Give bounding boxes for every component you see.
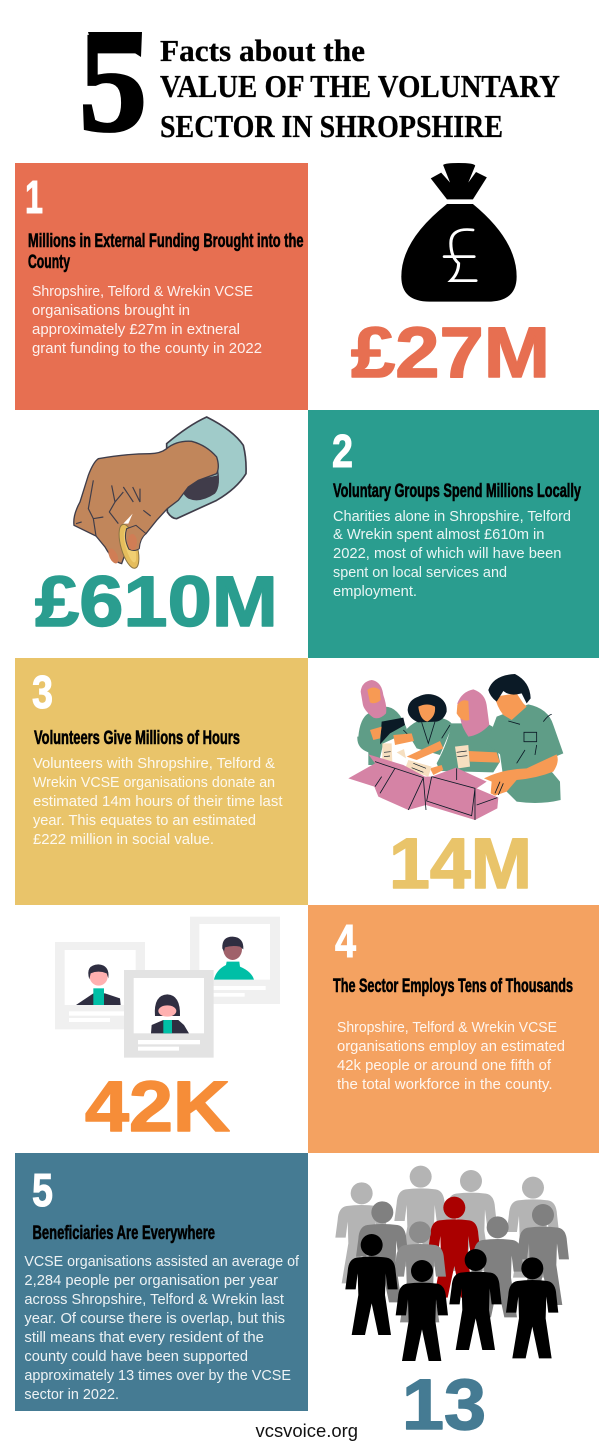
body text 3: £222 million in social value. bbox=[33, 832, 214, 848]
title bbox=[79, 3, 560, 161]
panel: fact 1 external funding bbox=[15, 163, 308, 410]
body text 4: 42k people or around one fifth of bbox=[337, 1058, 552, 1074]
stat: 13: 13 bbox=[402, 1366, 486, 1445]
body text 4: organisations employ an estimated bbox=[337, 1039, 565, 1055]
panel: fact 2 local spending bbox=[308, 410, 599, 658]
body text 1: Shropshire, Telford & Wrekin VCSE bbox=[32, 284, 253, 300]
title line 3: SECTOR IN SHROPSHIRE bbox=[160, 108, 503, 144]
card: front centre bbox=[124, 970, 214, 1058]
body text 2: & Wrekin spent almost £610m in bbox=[333, 527, 544, 543]
big numeral 5: 5 bbox=[79, 3, 147, 161]
body text 2: Charities alone in Shropshire, Telford bbox=[333, 509, 571, 525]
illustration: hand with coin bbox=[74, 417, 246, 570]
body text 1: grant funding to the county in 2022 bbox=[32, 341, 262, 357]
title line 1: Facts about the bbox=[160, 33, 365, 68]
heading 1: Millions in External Funding Brought into the bbox=[28, 231, 304, 252]
number 4: 4 bbox=[335, 915, 356, 967]
number 5: 5 bbox=[32, 1164, 53, 1216]
body text 5: year. Of course there is overlap, but this bbox=[24, 1311, 285, 1327]
card: back right bbox=[190, 917, 280, 1004]
right hijab volunteer bbox=[437, 723, 500, 772]
body text 5: county could have been supported bbox=[24, 1349, 248, 1365]
heading 3: Volunteers Give Millions of Hours bbox=[34, 728, 240, 749]
stat: £27M: £27M bbox=[351, 314, 550, 393]
body text 2: 2022, most of which will have been bbox=[333, 546, 562, 562]
body text 5: still means that every resident of the bbox=[24, 1330, 264, 1346]
body text 2: spent on local services and bbox=[333, 565, 507, 581]
title line 2: VALUE OF THE VOLUNTARY bbox=[160, 68, 560, 104]
panel: fact 4 employment bbox=[308, 905, 599, 1153]
stat: 42K: 42K bbox=[85, 1068, 230, 1147]
arm, hands, jars and tablet bbox=[380, 718, 405, 744]
body text 5: approximately 13 times over by the VCSE bbox=[24, 1368, 291, 1384]
body text 5: sector in 2022. bbox=[24, 1387, 119, 1403]
left volunteer bbox=[357, 707, 407, 765]
illustration: staff profile cards bbox=[55, 917, 280, 1058]
body text 3: Volunteers with Shropshire, Telford & bbox=[33, 756, 275, 772]
body text 1: organisations brought in bbox=[32, 303, 190, 319]
body text 2: employment. bbox=[333, 584, 417, 600]
body text 4: the total workforce in the county. bbox=[337, 1077, 552, 1093]
heading 5: Beneficiaries Are Everywhere bbox=[32, 1223, 215, 1244]
body text 5: 2,284 people per organisation per year bbox=[24, 1273, 278, 1289]
stat: £610M: £610M bbox=[35, 563, 278, 642]
body text 4: Shropshire, Telford & Wrekin VCSE bbox=[337, 1020, 557, 1036]
number 3: 3 bbox=[32, 666, 53, 718]
stat: 14M: 14M bbox=[389, 825, 532, 904]
body text 5: across Shropshire, Telford & Wrekin last bbox=[24, 1292, 284, 1308]
body text 3: estimated 14m hours of their time last bbox=[33, 794, 282, 810]
website footer: vcsvoice.org bbox=[256, 1420, 358, 1441]
heading 1: County bbox=[28, 252, 70, 273]
right volunteer bbox=[487, 704, 563, 803]
cardboard box bbox=[348, 754, 498, 820]
body text 1: approximately £27m in extneral bbox=[32, 322, 240, 338]
body text 3: Wrekin VCSE organisations donate an bbox=[33, 775, 275, 791]
body text 5: VCSE organisations assisted an average of bbox=[24, 1254, 300, 1270]
panel: fact 3 volunteers bbox=[15, 658, 308, 905]
body text 3: year. This equates to an estimated bbox=[33, 813, 256, 829]
middle volunteer bbox=[402, 718, 453, 755]
illustration: volunteers packing a box bbox=[348, 674, 563, 820]
number 1: 1 bbox=[25, 171, 43, 223]
illustration: crowd of people bbox=[335, 1166, 569, 1361]
number 2: 2 bbox=[332, 425, 353, 477]
card: back left bbox=[55, 942, 145, 1029]
panel: fact 5 beneficiaries bbox=[15, 1153, 308, 1411]
icon: money bag bbox=[401, 163, 517, 302]
